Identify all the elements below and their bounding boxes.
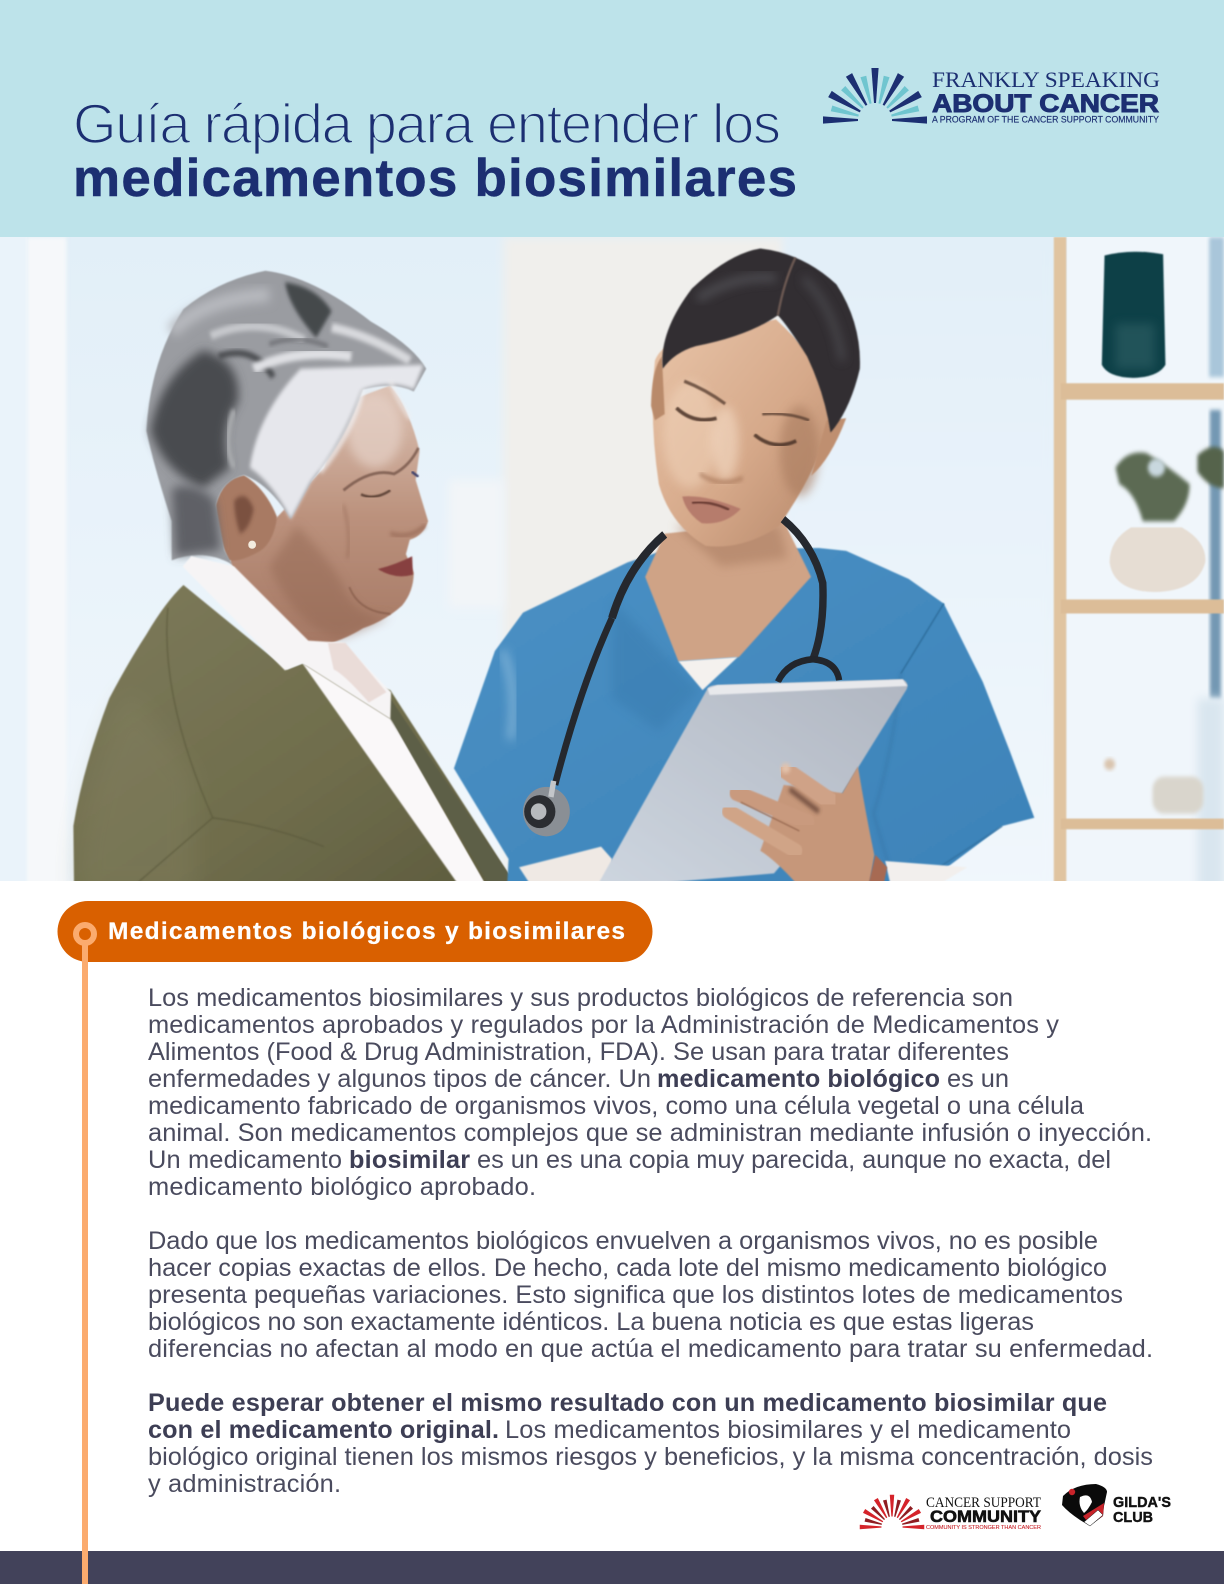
body paragraph 3: biológico original tienen los mismos riesgos y beneficios, y la misma concentración, dosis [148,1443,1153,1471]
white shirt collar and placket [183,556,492,896]
logo: Frankly Speaking About Cancer: FRANKLY SPEAKING [932,67,1160,92]
icon: dark vase [1102,252,1165,378]
body paragraph 3: Los medicamentos biosimilares y el medicamento [505,1416,1071,1444]
body paragraph 1: Un medicamento [148,1146,342,1174]
footer bar [0,1551,1224,1584]
watch and white cuff [884,860,966,881]
neck and face [230,385,428,649]
body paragraph 2: presenta pequeñas variaciones. Esto significa que los distintos lotes de medicamentos [148,1281,1123,1309]
body paragraph 1: medicamento biológico [657,1065,940,1093]
title: medicamentos biosimilares [73,149,797,208]
body paragraph 2: Dado que los medicamentos biológicos envuelven a organismos vivos, no es posible [148,1227,1098,1255]
logo: Gilda's Club [1062,1484,1171,1526]
shelf with vase and plant [1054,237,1224,896]
logo: Frankly Speaking About Cancer [823,67,1160,124]
hand holding tablet [729,763,874,896]
ears [651,356,665,420]
icon: timeline ring [76,925,94,943]
logo: Cancer Support Community [860,1495,1042,1531]
title [73,92,797,208]
stethoscope tubing [612,534,665,618]
patient [73,271,523,896]
body paragraph 3: con el medicamento original. [148,1416,499,1444]
body paragraph 2: diferencias no afectan al modo en que actúa el medicamento para tratar su enfermedad. [148,1335,1153,1363]
section heading pill [57,901,652,963]
body paragraph 3: Puede esperar obtener el mismo resultado con un medicamento biosimilar que [148,1389,1107,1417]
body paragraph 1 [148,984,1152,1201]
logo: Frankly Speaking About Cancer: ABOUT CANCER [932,90,1159,118]
body paragraph 2 [148,1227,1153,1363]
body paragraph 2: biológicos no son exactamente idénticos. La buena noticia es que estas ligeras [148,1308,1034,1336]
section heading pill: Medicamentos biológicos y biosimilares [108,918,625,945]
body paragraph 1: medicamentos aprobados y regulados por la Administración de Medicamentos y [148,1011,1059,1039]
scrub top [454,548,1034,896]
body paragraph 1: Los medicamentos biosimilares y sus productos biológicos de referencia son [148,984,1013,1012]
eye, brow, nose and lips [343,448,418,490]
photo: patient and nurse reading a tablet [0,237,1224,896]
logo: Gilda's Club: GILDA'S [1113,1495,1171,1511]
nurse [454,249,1034,896]
header band [0,0,1224,237]
stethoscope chest piece [523,780,570,836]
title: Guía rápida para entender los [73,92,781,155]
ear and earring [216,475,277,561]
white undershirt [678,657,738,690]
eyes, brows, nose and lips [684,381,725,404]
face [653,319,833,547]
body paragraph 3 [148,1389,1153,1498]
timeline line over footer [82,1551,88,1584]
logo: Cancer Support Community: COMMUNITY [930,1507,1042,1526]
photo background: window and wall [0,237,1067,881]
icon: navy and teal sunburst [823,68,927,124]
icon: red sunburst [860,1495,924,1529]
body paragraph 1: es un es una copia muy parecida, aunque no exacta, del [477,1146,1111,1174]
logo: Cancer Support Community: COMMUNITY IS STRONGER THAN CANCER [926,1525,1041,1531]
tablet [598,679,907,884]
logo: Frankly Speaking About Cancer: A PROGRAM OF THE CANCER SUPPORT COMMUNITY [932,114,1159,124]
body paragraph 1: enfermedades y algunos tipos de cáncer. Un [148,1065,651,1093]
cardigan [73,585,523,896]
icon: potted plant [1115,452,1190,521]
patient-side white sleeve [518,846,612,881]
logo: Gilda's Club: CLUB [1113,1510,1153,1526]
logo: Cancer Support Community: CANCER SUPPORT [926,1495,1041,1511]
body paragraph 1: biosimilar [349,1146,470,1174]
body paragraph 1: animal. Son medicamentos complejos que se administran mediante infusión o inyección. [148,1119,1152,1147]
body paragraph 1: medicamento fabricado de organismos vivos, como una célula vegetal o una célula [148,1092,1085,1120]
body paragraph 1: medicamento biológico aprobado. [148,1173,536,1201]
icon: Gilda figure in hat [1062,1484,1107,1526]
body paragraph 3: y administración. [148,1470,341,1498]
hair [662,249,860,433]
body paragraph 2: hacer copias exactas de ellos. De hecho, cada lote del mismo medicamento biológico [148,1254,1107,1282]
neck and chest [645,521,811,661]
timeline line [82,934,88,1584]
body paragraph 1: es un [947,1065,1009,1093]
hair [146,271,426,564]
body paragraph 1: Alimentos (Food & Drug Administration, FDA). Se usan para tratar diferentes [148,1038,1009,1066]
